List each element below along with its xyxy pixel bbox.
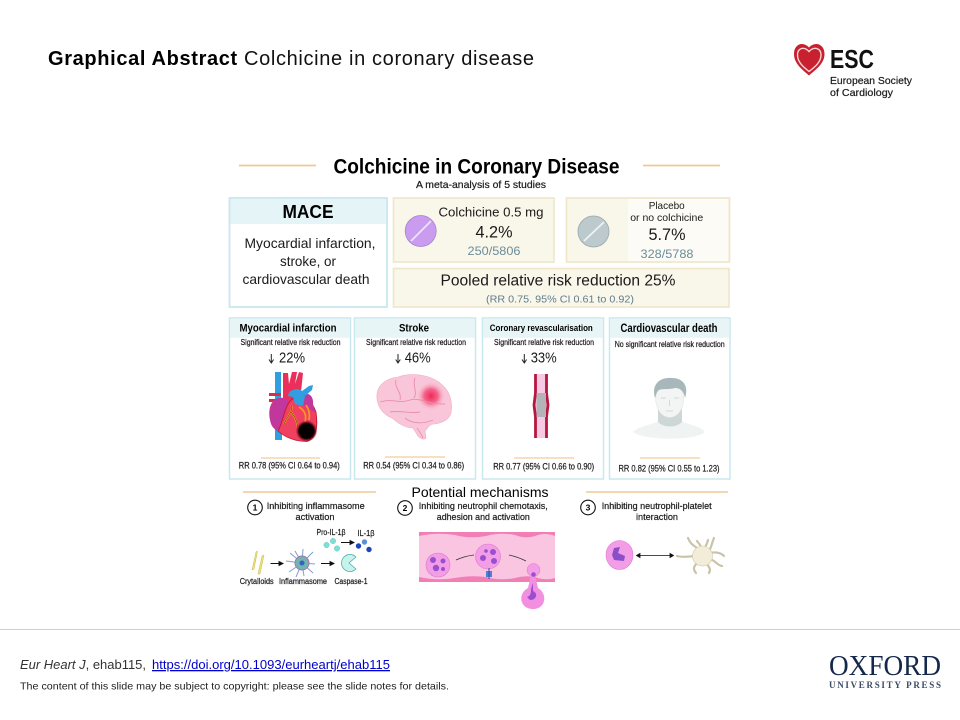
pooled confidence interval: (RR 0.75. 95% CI 0.61 to 0.92)	[486, 294, 634, 306]
subtitle: A meta-analysis of 5 studies	[416, 179, 546, 191]
panel: coronary revascularisation	[482, 318, 604, 479]
arrow: decrease	[522, 354, 527, 363]
University Press wordmark: UNIVERSITY PRESS	[829, 680, 941, 690]
arrow: decrease	[396, 354, 400, 363]
page title: Graphical Abstract Colchicine in coronary disease	[48, 48, 534, 70]
Oxford University Press logo	[829, 651, 941, 690]
citation: Eur Heart J, ehab115,	[20, 657, 146, 672]
arrow: cleavage	[341, 540, 354, 544]
value: 46%	[405, 350, 431, 367]
significance note: Significant relative risk reduction	[494, 338, 594, 347]
heading text: Colchicine in Coronary Disease	[334, 156, 620, 178]
MACE definition: cardiovascular death	[242, 271, 370, 287]
Oxford wordmark: OXFORD	[829, 651, 941, 682]
icon: pro-IL-1β dots	[324, 538, 340, 551]
ESC logo	[794, 44, 913, 87]
significance note: No significant relative risk reduction	[615, 340, 725, 349]
placebo rate: 5.7%	[648, 225, 686, 244]
number badge: 1	[253, 502, 258, 512]
mechanism title: interaction	[636, 512, 678, 522]
risk ratio: RR 0.82 (95% CI 0.55 to 1.23)	[618, 464, 720, 474]
mechanism title: Inhibiting neutrophil-platelet	[602, 501, 712, 511]
arrow: crystals to inflammasome	[270, 562, 283, 566]
mechanism title	[267, 501, 365, 522]
value: 33%	[531, 350, 557, 367]
placebo label	[630, 200, 703, 224]
number badge: 3	[586, 502, 591, 512]
icon: purple pill	[405, 216, 436, 246]
neutrophil rolling	[426, 553, 450, 577]
neutrophil transmigrating	[521, 564, 544, 609]
icon: IL-1β dots	[356, 539, 372, 552]
label: crystalloids: Crytalloids	[240, 577, 274, 586]
icon: crystals	[252, 551, 264, 574]
mechanism title: adhesion and activation	[437, 512, 530, 522]
panel: pooled result	[394, 268, 729, 307]
arrow: migration two	[509, 555, 526, 561]
neutrophil adhering	[476, 544, 500, 579]
card heading: Myocardial infarction	[240, 323, 337, 335]
icon: platelet	[677, 538, 724, 573]
panel: colchicine arm	[394, 198, 554, 262]
card heading: Stroke	[399, 323, 429, 335]
mechanism 1: inflammasome	[240, 500, 375, 586]
placebo label: or no colchicine	[630, 212, 703, 224]
mechanism title: Inhibiting neutrophil chemotaxis,	[419, 501, 548, 511]
ESC wordmark: ESC	[830, 44, 874, 74]
number badge	[581, 500, 595, 515]
citation	[20, 657, 390, 672]
mechanism 2: neutrophil chemotaxis	[398, 501, 555, 609]
mechanism title	[419, 501, 548, 522]
icon: inflammasome	[286, 549, 315, 577]
copyright note: The content of this slide may be subject to copyright: please see the slide notes for details.	[20, 680, 449, 692]
colchicine rate: 4.2%	[476, 222, 512, 242]
significance note: Significant relative risk reduction	[240, 338, 340, 347]
ESC full name: European Society	[830, 75, 913, 87]
number badge	[398, 501, 412, 515]
risk ratio: RR 0.77 (95% CI 0.66 to 0.90)	[493, 462, 594, 472]
citation: https://doi.org/10.1093/eurheartj/ehab115	[152, 657, 390, 672]
risk ratio: RR 0.78 (95% CI 0.64 to 0.94)	[239, 460, 340, 470]
label: Pro-IL-1β: Pro-IL-1β	[316, 528, 346, 537]
arrow: interaction	[636, 554, 674, 558]
value: 22%	[279, 350, 305, 367]
arrow: migration one	[456, 555, 474, 560]
arrow: decrease	[269, 354, 274, 363]
panel: MACE	[230, 198, 387, 307]
placebo events: 328/5788	[640, 247, 694, 261]
panel: placebo arm	[566, 198, 730, 262]
vessel	[419, 532, 555, 582]
MACE definition: Myocardial infarction,	[244, 235, 376, 251]
arrow: inflammasome to caspase	[321, 562, 334, 566]
icon: caspase-1	[341, 554, 356, 571]
icon: grey pill	[578, 216, 609, 247]
icon: brain	[377, 375, 452, 439]
placebo label: Placebo	[649, 200, 685, 212]
panel: myocardial infarction	[230, 318, 350, 479]
panel: cardiovascular death	[610, 318, 730, 479]
heading: potential mechanisms: Potential mechanisms	[412, 484, 548, 500]
label: inflammasome: Inflammasome	[279, 577, 327, 586]
card heading: Cardiovascular death	[620, 323, 718, 335]
colchicine events: 250/5806	[468, 244, 521, 258]
number badge: 2	[403, 503, 408, 513]
mechanism title: Inhibiting inflammasome	[267, 501, 365, 511]
label: caspase-1: Caspase-1	[334, 577, 368, 586]
card heading: Coronary revascularisation	[490, 323, 593, 334]
MACE definition: stroke, or	[280, 253, 336, 269]
pooled reduction: Pooled relative risk reduction 25%	[440, 272, 676, 290]
mechanism title: activation	[296, 512, 334, 522]
abstract heading	[239, 156, 720, 191]
MACE heading: MACE	[282, 202, 334, 222]
mechanism title	[602, 501, 712, 522]
panel: stroke	[354, 318, 476, 479]
colchicine label: Colchicine 0.5 mg	[438, 204, 544, 220]
ESC name second line: of Cardiology	[830, 87, 894, 99]
significance note: Significant relative risk reduction	[366, 338, 466, 347]
risk ratio: RR 0.54 (95% CI 0.34 to 0.86)	[363, 460, 464, 470]
icon: heart	[269, 372, 317, 442]
icon: neutrophil	[606, 540, 633, 570]
icon: patient head	[633, 378, 705, 439]
icon: stent in artery	[534, 374, 548, 438]
MACE definition	[242, 235, 376, 287]
label: IL-1β: IL-1β	[358, 529, 375, 538]
icon: ESC heart	[794, 44, 824, 76]
mechanism 3: neutrophil-platelet	[581, 500, 724, 573]
